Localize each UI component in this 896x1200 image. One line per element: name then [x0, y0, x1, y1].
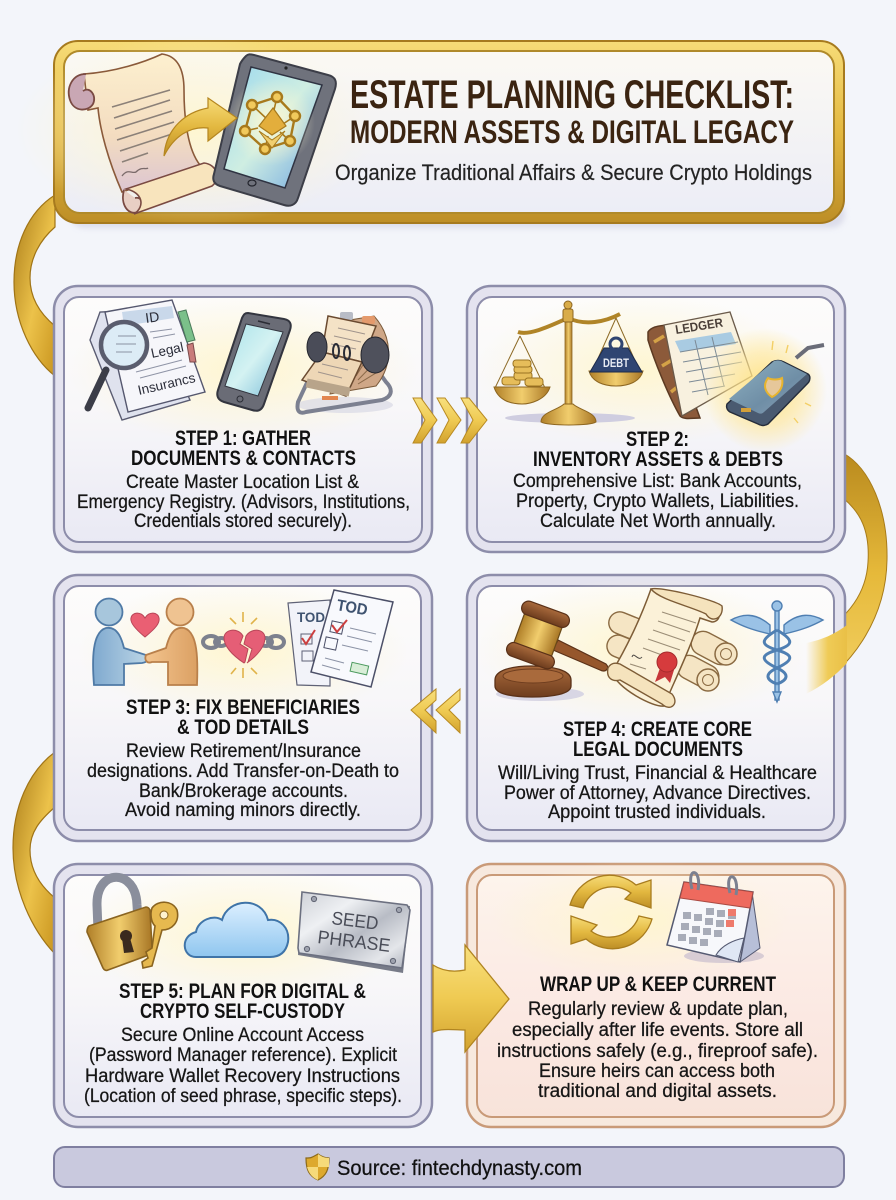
text: step 1 body: Emergency Registry. (Advisors, Institutions, [77, 491, 410, 513]
heading: step 3: STEP 3: FIX BENEFICIARIES [126, 695, 360, 719]
title [350, 73, 794, 150]
header inner card [64, 51, 834, 213]
icon: balance scale: DEBT [603, 358, 629, 370]
icon: documents with magnifier: Legal [150, 339, 185, 361]
text: step 1 body: Credentials stored securely). [134, 510, 352, 532]
text: step 3 body: Bank/Brokerage accounts. [139, 780, 348, 802]
heading: step 4: LEGAL DOCUMENTS [573, 737, 743, 761]
text: step 1 body: Create Master Location List & [126, 471, 359, 493]
arrow: chevrons step 4 to step 3 [411, 689, 460, 733]
icon: gold arrow scroll to tablet [164, 98, 237, 156]
footer bar [54, 1147, 844, 1187]
heading: step 5: STEP 5: PLAN FOR DIGITAL & [119, 979, 366, 1003]
text: step 1 body [77, 471, 410, 532]
icon: gavel [495, 599, 608, 701]
icon: broken heart with chains [203, 612, 284, 678]
arrow: chevrons step 1 to step 2 [413, 398, 487, 443]
text: wrap up body: especially after life events. Store all [512, 1019, 803, 1041]
text: step 3 body: designations. Add Transfer-on-Death to [87, 760, 399, 782]
icon: two people with heart [93, 598, 197, 685]
heading: step 2: STEP 2: [626, 427, 689, 451]
text: step 5 body: Hardware Wallet Recovery Instructions [85, 1065, 400, 1087]
icon: tablet with crypto network [213, 54, 336, 206]
heading: step 5 [119, 979, 366, 1023]
icon: caduceus [731, 601, 823, 702]
subtitle: Organize Traditional Affairs & Secure Crypto Holdings [335, 160, 812, 185]
heading: step 4 [563, 717, 752, 761]
ribbon connector: header to step 1 [14, 195, 55, 376]
icon: ledger book: LEDGER [674, 316, 724, 337]
text: step 3 body: Review Retirement/Insurance [126, 740, 361, 762]
panel: step 2 [467, 286, 845, 552]
text: step 4 body [498, 762, 817, 823]
panel: step 1 [54, 286, 432, 552]
text: step 4 body: Power of Attorney, Advance Directives. [504, 782, 811, 804]
icon: seed phrase plate: SEED [331, 907, 380, 934]
ribbon connector: step 3 to step 5 [13, 752, 55, 954]
text: step 3 body [87, 740, 399, 821]
text: step 5 body: Secure Online Account Access [121, 1024, 364, 1046]
text: step 4 body: Appoint trusted individuals. [548, 801, 766, 823]
icon: documents with magnifier [88, 300, 205, 420]
ribbon connector: step 2 to step 4 [806, 453, 887, 694]
text: wrap up body [497, 998, 818, 1102]
icon: hardware wallet [703, 328, 827, 452]
arrow: big gold arrow step 5 to wrap up [433, 945, 509, 1052]
icon: seed phrase plate [298, 892, 410, 973]
crypto network glyph [240, 92, 300, 154]
heading: step 3: & TOD DETAILS [177, 715, 309, 739]
text: step 5 body: (Location of seed phrase, specific steps). [84, 1085, 402, 1107]
icon: shield [306, 1154, 329, 1180]
icon: sync arrows [570, 875, 652, 949]
icon: calendar [667, 873, 764, 963]
header gold frame [54, 41, 844, 223]
icon: smartphone [217, 313, 291, 411]
icon: padlock and key [87, 877, 178, 970]
heading: step 1: STEP 1: GATHER [175, 426, 311, 450]
heading: step 1 [131, 426, 356, 470]
text: step 2 body: Comprehensive List: Bank Accounts, [513, 470, 802, 492]
text: step 5 body [84, 1024, 402, 1107]
heading: wrap up: WRAP UP & KEEP CURRENT [540, 972, 776, 996]
icon: TOD documents: TOD [335, 597, 369, 619]
text: wrap up body: traditional and digital assets. [538, 1080, 777, 1102]
panel: step 3 [54, 575, 432, 841]
source text: Source: fintechdynasty.com [337, 1157, 582, 1180]
heading: step 4: STEP 4: CREATE CORE [563, 717, 752, 741]
header panel [15, 35, 845, 228]
icon: ledger book [648, 312, 752, 418]
icon: balance scale [494, 301, 643, 425]
header glow [15, 35, 375, 225]
text: step 2 body: Calculate Net Worth annually. [540, 510, 776, 532]
text: wrap up body: Regularly review & update plan, [528, 998, 788, 1020]
heading: step 2: INVENTORY ASSETS & DEBTS [533, 447, 783, 471]
text: step 2 body: Property, Crypto Wallets, Liabilities. [516, 490, 799, 512]
text: step 2 body [513, 470, 802, 532]
text: wrap up body: instructions safely (e.g., fireproof safe). [497, 1040, 818, 1062]
icon: documents with magnifier: ID [144, 308, 160, 326]
panel: step 4 [467, 575, 845, 841]
icon: TOD documents [288, 590, 393, 687]
icon: seed phrase plate: PHRASE [317, 926, 392, 956]
text: step 4 body: Will/Living Trust, Financial & Healthcare [498, 762, 817, 784]
panel: step 5 [54, 864, 432, 1127]
text: step 3 body: Avoid naming minors directly. [125, 799, 361, 821]
heading: step 5: CRYPTO SELF-CUSTODY [140, 999, 345, 1023]
text: step 5 body: (Password Manager reference). Explicit [89, 1044, 398, 1066]
icon: cloud [185, 903, 288, 957]
heading: step 2 [533, 427, 783, 471]
icon: legal scrolls with seal [604, 589, 737, 707]
heading: step 3 [126, 695, 360, 739]
icon: TOD documents: TOD [297, 609, 325, 625]
panel: wrap up [467, 860, 845, 1127]
icon: documents with magnifier: Insurancs [136, 370, 197, 398]
icon: rolodex [297, 312, 393, 413]
ribbon overlap on step 4 [806, 625, 847, 694]
heading: step 1: DOCUMENTS & CONTACTS [131, 446, 356, 470]
icon: document scroll [69, 54, 217, 214]
text: wrap up body: Ensure heirs can access both [539, 1060, 775, 1082]
